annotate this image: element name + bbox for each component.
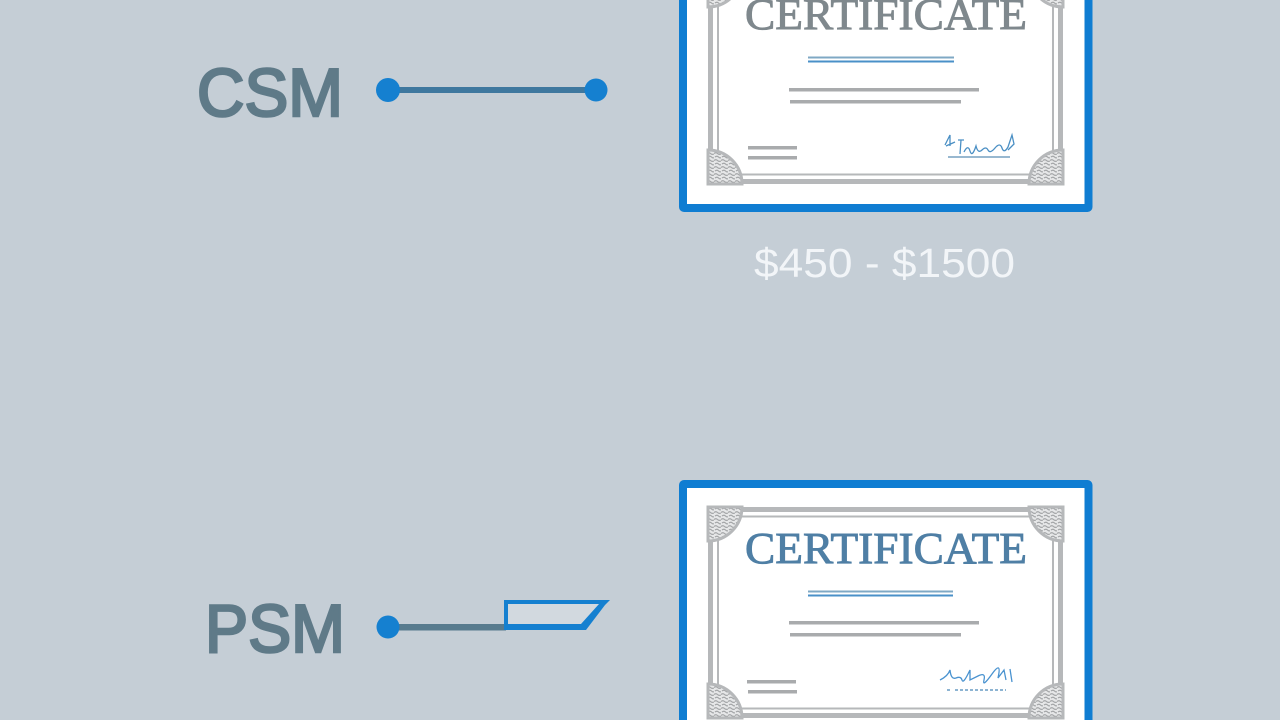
- footer text lines: [748, 146, 797, 160]
- certificate frame: [683, 484, 1088, 720]
- signature: [945, 135, 1014, 157]
- label: CSM: CSM: [197, 55, 343, 131]
- price range: $450 - $1500: [754, 240, 1015, 286]
- connector: PSM with arrow shape: [376, 600, 610, 638]
- label: PSM: PSM: [205, 591, 345, 667]
- certificate title: CERTIFICATE: [745, 524, 1027, 573]
- ornamental border: [708, 507, 1063, 718]
- ornamental border: [708, 0, 1063, 184]
- footer text lines: [747, 680, 797, 694]
- certificate frame: [683, 0, 1088, 208]
- body text lines: [789, 88, 979, 104]
- certificate: PSM: [683, 484, 1088, 720]
- signature: [940, 668, 1012, 690]
- connector: CSM to certificate: [376, 78, 608, 102]
- double underline: [808, 56, 954, 62]
- body text lines: [789, 621, 979, 636]
- certificate: CSM: [683, 0, 1088, 208]
- double underline: [808, 590, 953, 596]
